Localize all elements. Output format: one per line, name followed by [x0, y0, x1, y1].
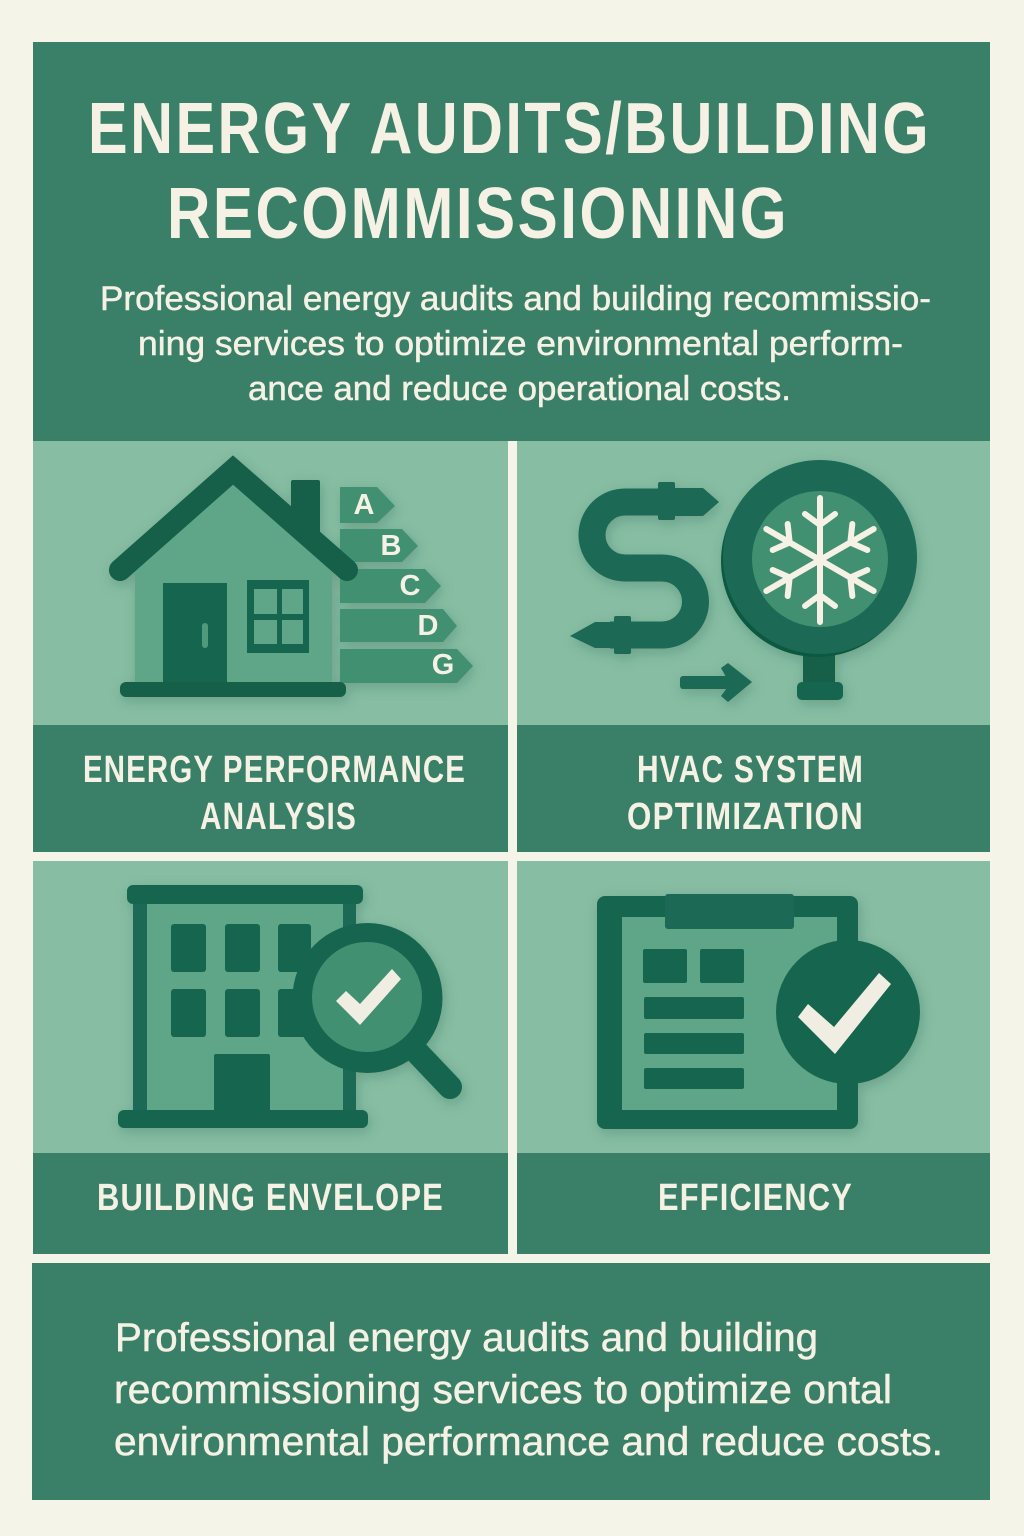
icon: house with energy rating labels: D — [418, 610, 438, 642]
icon: house with energy rating labels: B — [381, 530, 401, 562]
footer text — [114, 1316, 943, 1464]
icon: house with energy rating labels: A — [354, 489, 375, 521]
icon: clipboard with checkmark — [597, 894, 920, 1129]
icon: building with magnifier — [118, 885, 450, 1128]
panel: efficiency — [517, 861, 990, 1254]
footer text: environmental performance and reduce costs. — [114, 1420, 943, 1464]
panel: footer summary — [32, 1263, 990, 1500]
label: EFFICIENCY — [658, 1177, 853, 1219]
label — [627, 749, 864, 838]
panel: header — [33, 42, 990, 441]
panel: energy performance analysis — [33, 441, 508, 852]
icon: house with energy rating labels: G — [432, 649, 454, 681]
footer text: recommissioning services to optimize ontal — [114, 1368, 892, 1412]
label: ENERGY PERFORMANCE — [83, 749, 466, 791]
label: HVAC SYSTEM — [637, 749, 864, 791]
title: RECOMMISSIONING — [167, 174, 789, 254]
label — [83, 749, 466, 838]
subtitle: ning services to optimize environmental perform- — [138, 325, 903, 363]
subtitle: ance and reduce operational costs. — [248, 370, 791, 408]
label: OPTIMIZATION — [627, 796, 864, 838]
subtitle: Professional energy audits and building recommissio- — [100, 280, 931, 318]
panel: building envelope — [33, 861, 508, 1254]
subtitle — [100, 280, 931, 408]
label: ANALYSIS — [200, 796, 357, 838]
icon: house with energy rating labels — [120, 470, 473, 697]
label: BUILDING ENVELOPE — [97, 1177, 444, 1219]
icon: hvac pipe and snowflake gauge — [570, 460, 917, 702]
panel: hvac system optimization — [517, 441, 990, 852]
icon: snowflake — [759, 498, 881, 622]
icon: house with energy rating labels: C — [400, 570, 421, 602]
title — [88, 89, 931, 254]
footer text: Professional energy audits and building — [115, 1316, 818, 1360]
